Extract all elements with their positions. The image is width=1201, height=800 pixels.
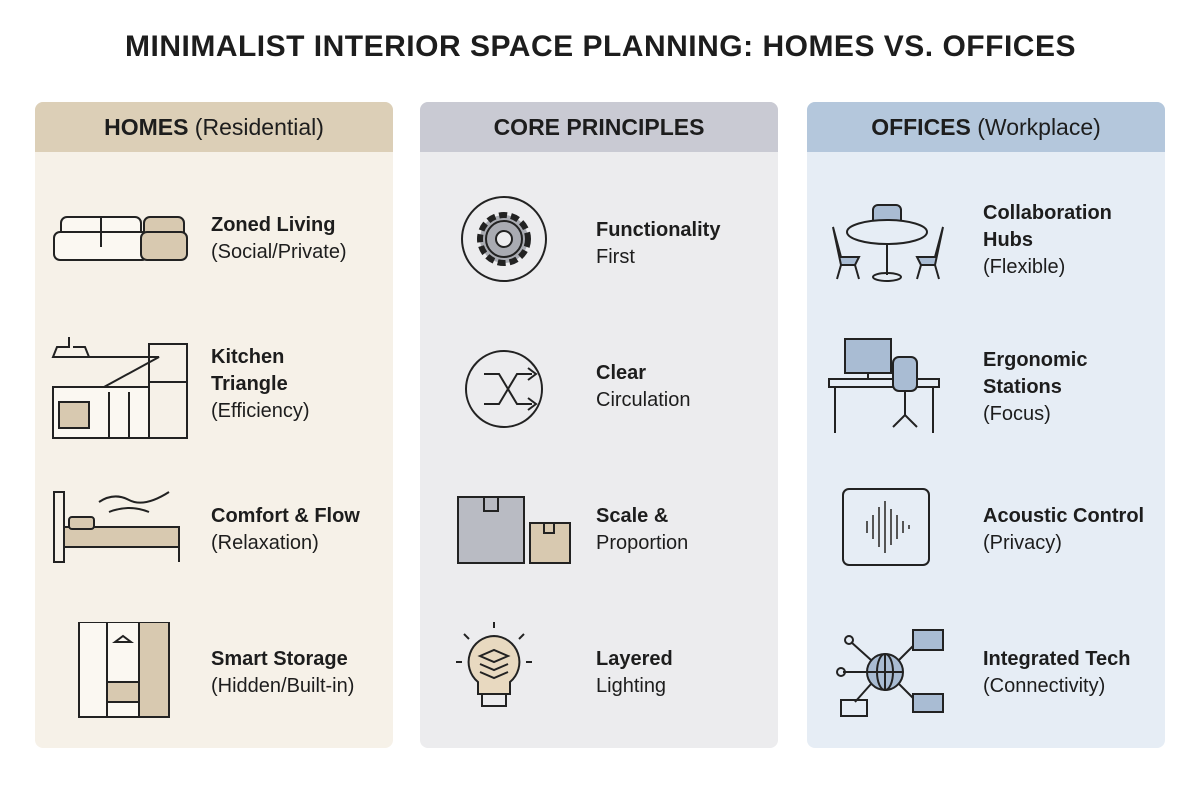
item: collaboration bbox=[832, 202, 1112, 282]
item: ergonomic: (Focus) bbox=[983, 403, 1051, 425]
item: functionality bbox=[461, 196, 720, 282]
icon: network bbox=[836, 629, 944, 717]
header: core bbox=[420, 102, 778, 152]
item: lighting: Layered bbox=[596, 648, 673, 670]
header: offices: OFFICES (Workplace) bbox=[871, 114, 1101, 140]
item: zoned living: (Social/Private) bbox=[211, 241, 347, 263]
item: scale bbox=[457, 496, 688, 564]
item: bedroom bbox=[53, 491, 360, 563]
item: zoned living: Zoned Living bbox=[211, 214, 335, 236]
item: kitchen bbox=[52, 337, 310, 439]
item: zoned living bbox=[53, 214, 347, 263]
panel: core principles bbox=[420, 102, 778, 748]
item: functionality: First bbox=[596, 246, 635, 268]
icon: boxes bbox=[457, 496, 571, 564]
icon: bed bbox=[53, 491, 180, 563]
item: ergonomic bbox=[828, 338, 1087, 433]
item: ergonomic: Ergonomic bbox=[983, 349, 1087, 371]
icon: sound bbox=[842, 488, 930, 566]
item: collaboration: Hubs bbox=[983, 229, 1033, 251]
panel: offices bbox=[807, 102, 1165, 748]
item: tech: (Connectivity) bbox=[983, 675, 1105, 697]
icon: desk bbox=[828, 338, 940, 433]
icon: gear bbox=[461, 196, 547, 282]
item: acoustic: Acoustic Control bbox=[983, 505, 1144, 527]
item: collaboration: (Flexible) bbox=[983, 256, 1065, 278]
item: ergonomic: Stations bbox=[983, 376, 1062, 398]
icon: sofa bbox=[53, 216, 188, 261]
item: functionality: Functionality bbox=[596, 219, 720, 241]
header: homes bbox=[35, 102, 393, 152]
icon: kitchen bbox=[52, 337, 188, 439]
title: MINIMALIST INTERIOR SPACE PLANNING: HOMES VS. OFFICES bbox=[125, 30, 1076, 63]
item: circulation: Circulation bbox=[596, 389, 690, 411]
item: circulation bbox=[465, 350, 690, 428]
item: lighting: Lighting bbox=[596, 675, 666, 697]
item: circulation: Clear bbox=[596, 362, 646, 384]
item: tech: Integrated Tech bbox=[983, 648, 1130, 670]
item: scale: Scale & bbox=[596, 505, 668, 527]
icon: bulb bbox=[456, 622, 532, 707]
item: bedroom: Comfort & Flow bbox=[211, 505, 360, 527]
item: scale: Proportion bbox=[596, 532, 688, 554]
item: collaboration: Collaboration bbox=[983, 202, 1112, 224]
item: kitchen: Kitchen bbox=[211, 346, 284, 368]
item: acoustic bbox=[842, 488, 1144, 566]
item: lighting bbox=[456, 622, 673, 707]
item: acoustic: (Privacy) bbox=[983, 532, 1062, 554]
icon: table bbox=[832, 204, 944, 282]
item: tech bbox=[836, 629, 1130, 717]
icon: arrows bbox=[465, 350, 543, 428]
item: kitchen: (Efficiency) bbox=[211, 400, 310, 422]
item: storage: (Hidden/Built-in) bbox=[211, 675, 354, 697]
panel: homes bbox=[35, 102, 393, 748]
header: offices bbox=[807, 102, 1165, 152]
item: storage: Smart Storage bbox=[211, 648, 348, 670]
icon: wardrobe bbox=[78, 622, 170, 718]
header: homes: HOMES (Residential) bbox=[104, 114, 324, 140]
item: storage bbox=[78, 622, 354, 718]
header: core: CORE PRINCIPLES bbox=[494, 114, 704, 140]
item: bedroom: (Relaxation) bbox=[211, 532, 319, 554]
item: kitchen: Triangle bbox=[211, 373, 288, 395]
